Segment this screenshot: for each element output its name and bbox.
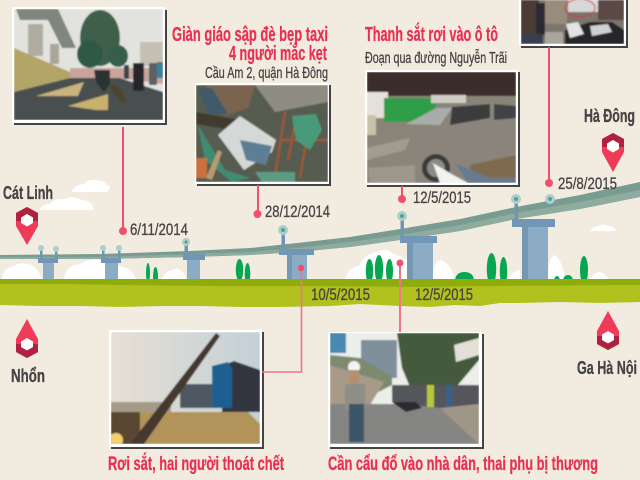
viaduct deck: [0, 182, 640, 259]
heading: steel bar on car: Thanh sắt rơi vào ô tô: [365, 22, 498, 46]
ground band: [0, 279, 640, 307]
heading: steel bar on car: Đoạn qua đường Nguyễn Trãi: [365, 48, 507, 67]
icon: Ga Hà Nội pin: [597, 311, 619, 350]
photo: grey car: [365, 70, 520, 187]
clouds: [2, 180, 616, 279]
pier caps: [38, 219, 555, 263]
icon: Nhổn pin: [16, 319, 38, 358]
lamp posts: [38, 194, 555, 259]
date: 25/8/2015: 25/8/2015: [558, 174, 617, 193]
date: 12/5/2015 top: 12/5/2015: [413, 188, 471, 207]
timeline connector: 25/8/2015: [545, 47, 553, 187]
timeline connector: 6/11/2014: [119, 127, 127, 235]
photo: crane fallen on house: [328, 332, 484, 449]
deck highlight: [0, 190, 640, 259]
heading: scaffold collapse: [172, 24, 328, 82]
photo: steel bar fallen at dusk: [109, 330, 264, 449]
timeline connector: 10/5/2015: [262, 265, 304, 372]
date: 28/12/2014: 28/12/2014: [265, 202, 330, 221]
heading: scaffold collapse: Cầu Am 2, quận Hà Đông: [205, 65, 328, 82]
heading: scaffold collapse: 4 người mắc kẹt: [229, 41, 327, 65]
date: 6/11/2014: 6/11/2014: [130, 220, 188, 239]
date: 12/5/2015 bottom: 12/5/2015: [415, 285, 473, 304]
caption: steel falls: Rơi sắt, hai người thoát chết: [108, 453, 284, 475]
trees: [146, 253, 588, 287]
icon: Hà Đông pin: [602, 133, 624, 172]
date: 10/5/2015: 10/5/2015: [311, 285, 370, 304]
icon: Cát Linh pin: [16, 207, 38, 245]
label: Cát Linh: Cát Linh: [3, 183, 53, 203]
heading: steel bar on car: [365, 22, 507, 67]
viaduct: pier columns: [43, 226, 548, 279]
heading: scaffold collapse: Giàn giáo sập đè bẹp taxi: [172, 24, 328, 46]
photo: motorbikes on street, top right: [519, 0, 628, 48]
photo: scaffold collapse scene, top left: [12, 7, 167, 125]
label: Nhổn: Nhổn: [11, 366, 45, 386]
timeline connector: 12/5/2015 top: [398, 186, 406, 203]
timeline connector: 12/5/2015 bottom: [396, 260, 404, 332]
photo: collapsed scaffolding: [195, 83, 331, 186]
timeline connector: 28/12/2014: [254, 185, 262, 218]
